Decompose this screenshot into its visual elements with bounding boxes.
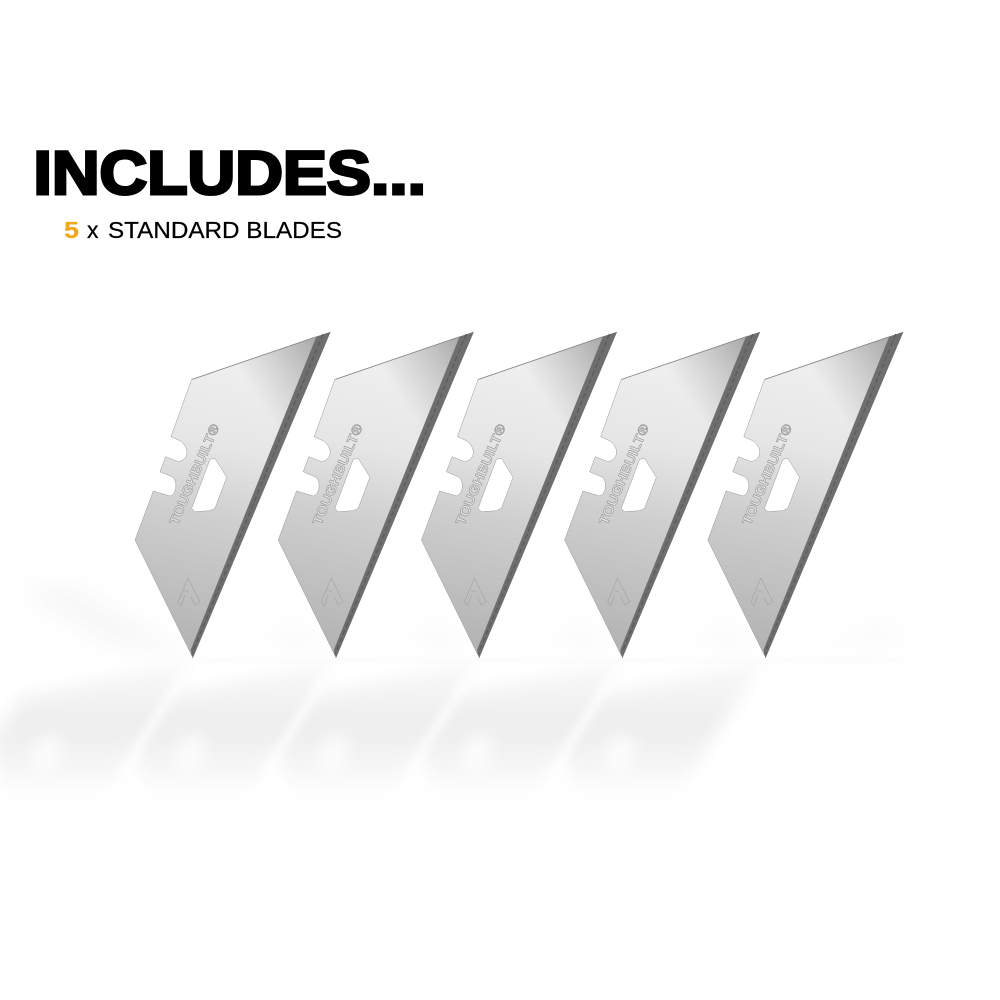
blade 1 (135, 332, 331, 658)
blade 5 brand mark: TOUGHBUILT® (739, 422, 795, 527)
shadows cast by blades (0, 660, 765, 798)
subtitle: blade count: STANDARD BLADES (108, 217, 342, 243)
floor reflections behind blades (16, 585, 905, 663)
blade 1 brand mark: TOUGHBUILT® (166, 422, 222, 527)
title: INCLUDES... (34, 139, 426, 207)
blade 3 (421, 332, 617, 658)
blade 4 (565, 332, 760, 658)
blade 2 (278, 332, 474, 658)
blade 2 brand mark: TOUGHBUILT® (310, 422, 366, 527)
blade 3 brand mark: TOUGHBUILT® (453, 422, 509, 527)
subtitle: blade count: x (87, 217, 99, 243)
blade 4 brand mark: TOUGHBUILT® (596, 422, 652, 527)
blade 5 (708, 332, 904, 658)
subtitle: blade count: 5 (64, 217, 79, 243)
